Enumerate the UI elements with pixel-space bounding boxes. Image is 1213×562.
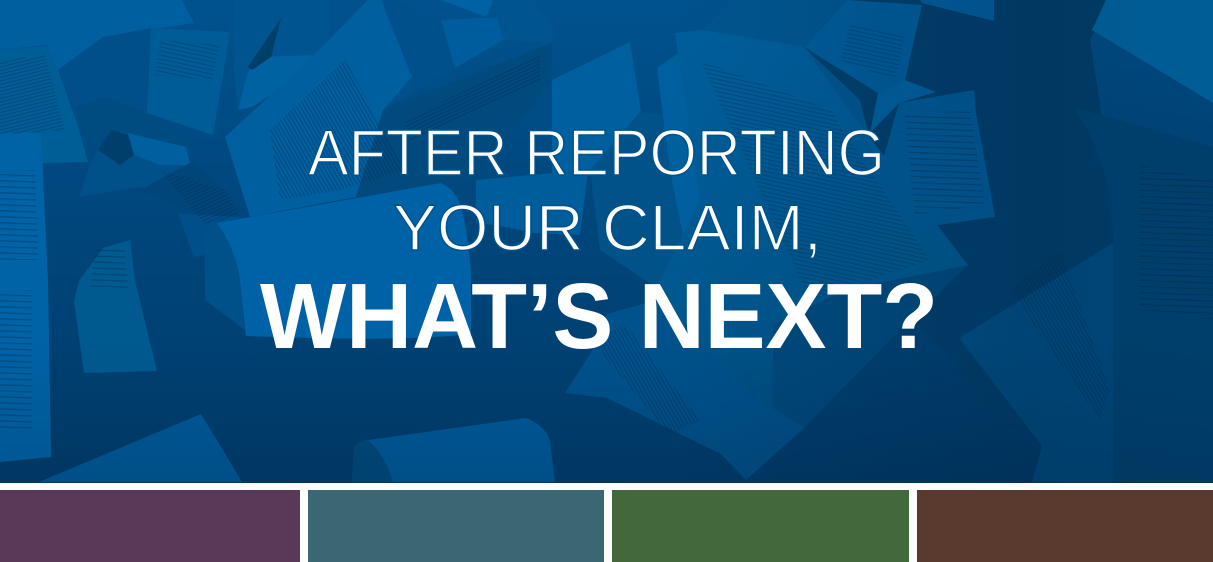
panel: green bar [612,490,909,562]
paper print lines [0,25,1213,435]
panel: teal bar [308,490,604,562]
title line 2: YOUR CLAIM, [393,191,822,264]
title: three centred lines [260,116,938,368]
title line 1: AFTER REPORTING [308,116,885,189]
panel: brown bar [917,490,1213,562]
panel: purple bar [0,490,300,562]
title line 3: WHAT’S NEXT? [260,264,938,368]
